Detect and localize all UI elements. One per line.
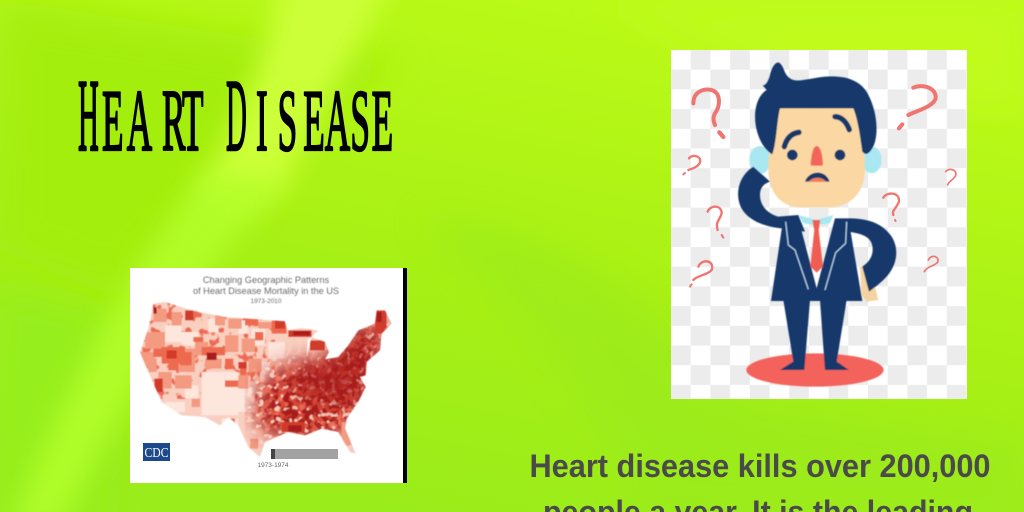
tie <box>810 220 823 273</box>
lapels <box>786 222 847 290</box>
title: Heart Disease: H <box>78 60 99 173</box>
hair <box>755 62 877 154</box>
map title: Changing Geographic Patterns <box>203 275 329 285</box>
image: US heart disease mortality map <box>130 268 407 483</box>
CDC logo: CDC <box>144 446 168 461</box>
eyebrows <box>784 117 849 147</box>
title: Heart Disease: EART <box>102 73 204 170</box>
floor ellipse <box>746 353 884 387</box>
core of darkest counties <box>282 326 381 416</box>
nose <box>811 146 823 166</box>
jacket <box>771 218 862 301</box>
title: Heart Disease <box>78 60 393 173</box>
title: Heart Disease: D <box>226 60 247 173</box>
businessman figure <box>738 62 896 387</box>
legs and shoes <box>780 300 849 370</box>
text block: heart disease statistic <box>530 448 990 512</box>
question marks <box>683 86 956 287</box>
face <box>768 108 865 207</box>
choropleth map of the US <box>135 299 398 462</box>
title: Heart Disease: ISEASE <box>256 73 393 170</box>
timeline bar <box>257 449 338 469</box>
map title <box>193 275 339 305</box>
hand <box>860 267 878 302</box>
mouth <box>805 173 830 182</box>
raised arm <box>738 167 805 232</box>
eyes <box>787 150 845 160</box>
timeline bar: 1973-1974 <box>257 462 289 469</box>
text block: heart disease statistic: Heart disease kills over 200,000 <box>530 448 990 484</box>
image: confused businessman on checkered background <box>671 50 967 399</box>
map title: of Heart Disease Mortality in the US <box>193 286 339 296</box>
collar <box>798 215 833 225</box>
map title: 1973-2010 <box>250 298 282 305</box>
right arm <box>848 218 896 292</box>
eastern mottled high-mortality region <box>244 314 392 448</box>
ears <box>749 146 882 174</box>
